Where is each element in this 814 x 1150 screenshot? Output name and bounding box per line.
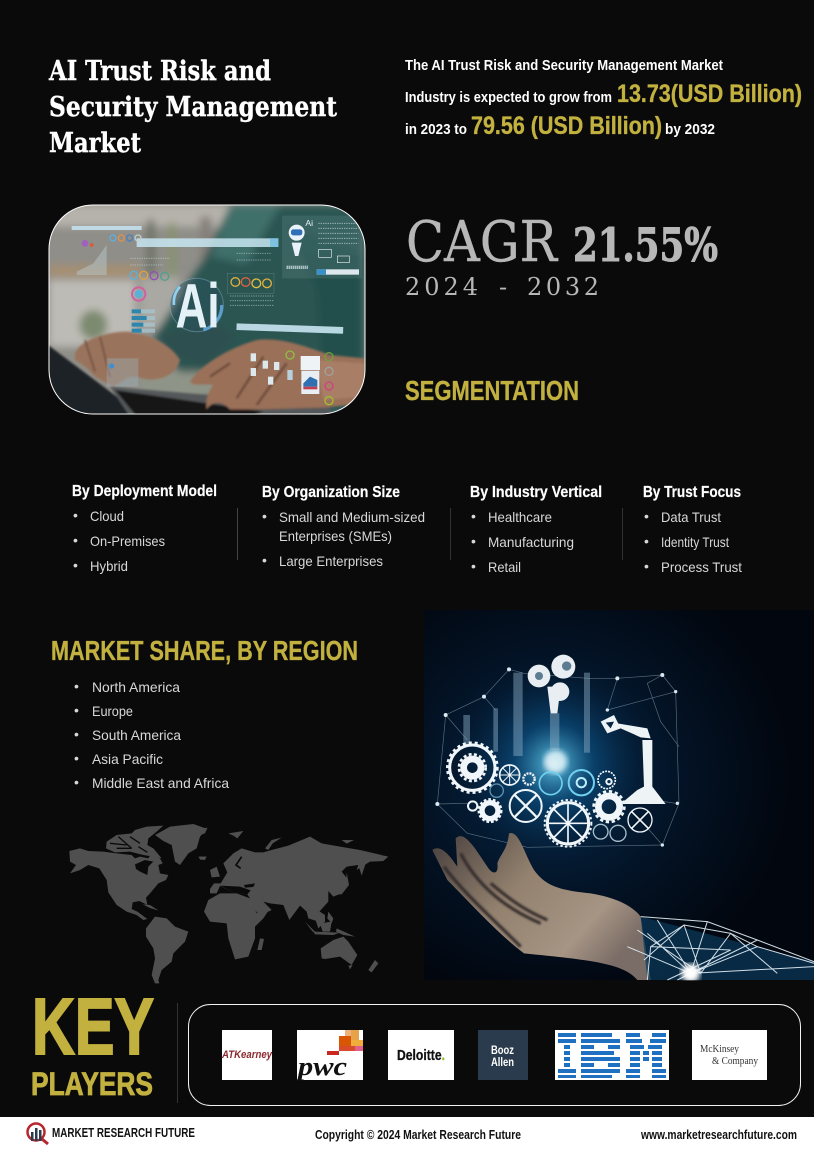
logo: Deloitte: Deloitte. [397, 1047, 445, 1064]
column: by organization size [262, 484, 425, 569]
logo: McKinsey & Company: & Company [712, 1056, 758, 1067]
logo: IBM [555, 1030, 669, 1080]
top gear cluster [528, 655, 575, 713]
column: by organization size: • [262, 508, 267, 524]
fine data text rows [130, 253, 273, 305]
wire network [437, 669, 679, 847]
region list: North America [92, 679, 180, 695]
column: by organization size: By Organization Size [262, 484, 400, 501]
region list: • [74, 726, 79, 742]
CAGR figure: - [499, 273, 507, 301]
region list: Asia Pacific [92, 751, 163, 767]
hand [432, 833, 651, 980]
column: by trust focus: • [644, 508, 649, 524]
glow core [544, 750, 567, 773]
logo: McKinsey & Company: McKinsey [700, 1044, 739, 1055]
column: by organization size: • [262, 552, 267, 568]
column: by industry vertical [470, 484, 602, 575]
column: by deployment model [72, 483, 217, 574]
towers [463, 673, 590, 756]
column: by trust focus: • [644, 558, 649, 574]
footer: MARKET RESEARCH FUTURE [52, 1126, 195, 1140]
heading: key players [31, 982, 154, 1102]
left hand [75, 332, 180, 387]
column: by deployment model: • [73, 507, 78, 523]
wireframe arm [641, 917, 814, 980]
market growth summary text [405, 57, 802, 140]
title [48, 56, 337, 159]
logo: Booz Allen: Allen [491, 1055, 514, 1069]
footer: Copyright © 2024 Market Research Future [315, 1128, 521, 1142]
robot panel [282, 216, 362, 278]
region list: Europe [92, 703, 133, 719]
logo: Deloitte [388, 1030, 454, 1080]
heading: key players: PLAYERS [31, 1066, 153, 1102]
column: by industry vertical: Healthcare [488, 509, 552, 525]
market growth summary text: by 2032 [665, 121, 715, 138]
region list: • [74, 678, 79, 694]
gears [447, 743, 652, 847]
title: Market [49, 128, 141, 159]
logo: McKinsey & Company [692, 1030, 767, 1080]
column: by trust focus: Data Trust [661, 509, 721, 525]
region list: Middle East and Africa [92, 775, 229, 791]
CAGR figure: 21.55% [573, 218, 718, 272]
CAGR figure: CAGR [406, 210, 559, 275]
robot arm [601, 715, 666, 804]
column: by organization size: Enterprises (SMEs) [279, 528, 392, 544]
region list: South America [92, 727, 181, 743]
column: by industry vertical: • [471, 533, 476, 549]
CAGR figure [405, 210, 718, 301]
logo: Booz Allen [478, 1030, 528, 1080]
market growth summary text: 79.56 (USD Billion) [471, 112, 662, 140]
chart panel [77, 245, 107, 275]
region list: • [74, 750, 79, 766]
column: by industry vertical: Manufacturing [488, 534, 574, 550]
CAGR figure: 2024 [405, 273, 478, 301]
heading: key players: KEY [32, 982, 154, 1071]
photo: hands typing on laptop with AI overlay: Ai [305, 218, 313, 228]
footer [0, 1117, 814, 1150]
logo: Booz Allen: Booz [491, 1043, 514, 1057]
icon: market research future logo [28, 1124, 48, 1144]
left laptop body [50, 344, 130, 414]
column: by industry vertical: Retail [488, 559, 521, 575]
heading: market share by region: MARKET SHARE, BY REGION [51, 635, 358, 666]
right hand [190, 339, 365, 409]
floating document tiles [301, 356, 320, 370]
logo: AT Kearney: ATKearney [221, 1049, 273, 1061]
title: Security Management [49, 92, 337, 123]
market growth summary text: The AI Trust Risk and Security Management Market [405, 57, 723, 74]
illustration: hand holding glowing gears [424, 610, 814, 990]
column: by industry vertical: • [471, 558, 476, 574]
region list: • [74, 702, 79, 718]
region list [74, 678, 229, 791]
logo: PwC: pwc [296, 1052, 348, 1081]
column: by deployment model: By Deployment Model [72, 483, 217, 500]
market growth summary text: in 2023 to [405, 121, 467, 138]
AI badge [170, 278, 224, 332]
column: by trust focus: Identity Trust [661, 534, 729, 550]
column: by organization size: Small and Medium-sized [279, 509, 425, 525]
title: AI Trust Risk and [48, 56, 271, 87]
column: by deployment model: On-Premises [90, 533, 165, 549]
column: by deployment model: • [73, 532, 78, 548]
column: by industry vertical: • [471, 508, 476, 524]
column: by trust focus: Process Trust [661, 559, 742, 575]
column: by trust focus: By Trust Focus [643, 484, 741, 501]
world map [69, 824, 388, 983]
column: by industry vertical: By Industry Vertical [470, 484, 602, 501]
small rings [110, 235, 333, 405]
overlay bars [72, 226, 142, 230]
region list: • [74, 774, 79, 790]
column: by deployment model: • [73, 557, 78, 573]
photo: hands typing on laptop with AI overlay [47, 205, 365, 417]
AI badge: Ai [176, 271, 220, 341]
logo: PwC [296, 1030, 363, 1081]
market growth summary text: Industry is expected to grow from [405, 89, 612, 106]
CAGR figure: 2032 [527, 273, 599, 301]
column: by trust focus [643, 484, 742, 575]
panel: key player logos [188, 1004, 800, 1106]
column: by organization size: Large Enterprises [279, 553, 383, 569]
logo: AT Kearney [221, 1030, 273, 1080]
column: by trust focus: • [644, 533, 649, 549]
column: by deployment model: Cloud [90, 508, 124, 524]
heading: segmentation: SEGMENTATION [405, 375, 579, 406]
column: by deployment model: Hybrid [90, 558, 128, 574]
